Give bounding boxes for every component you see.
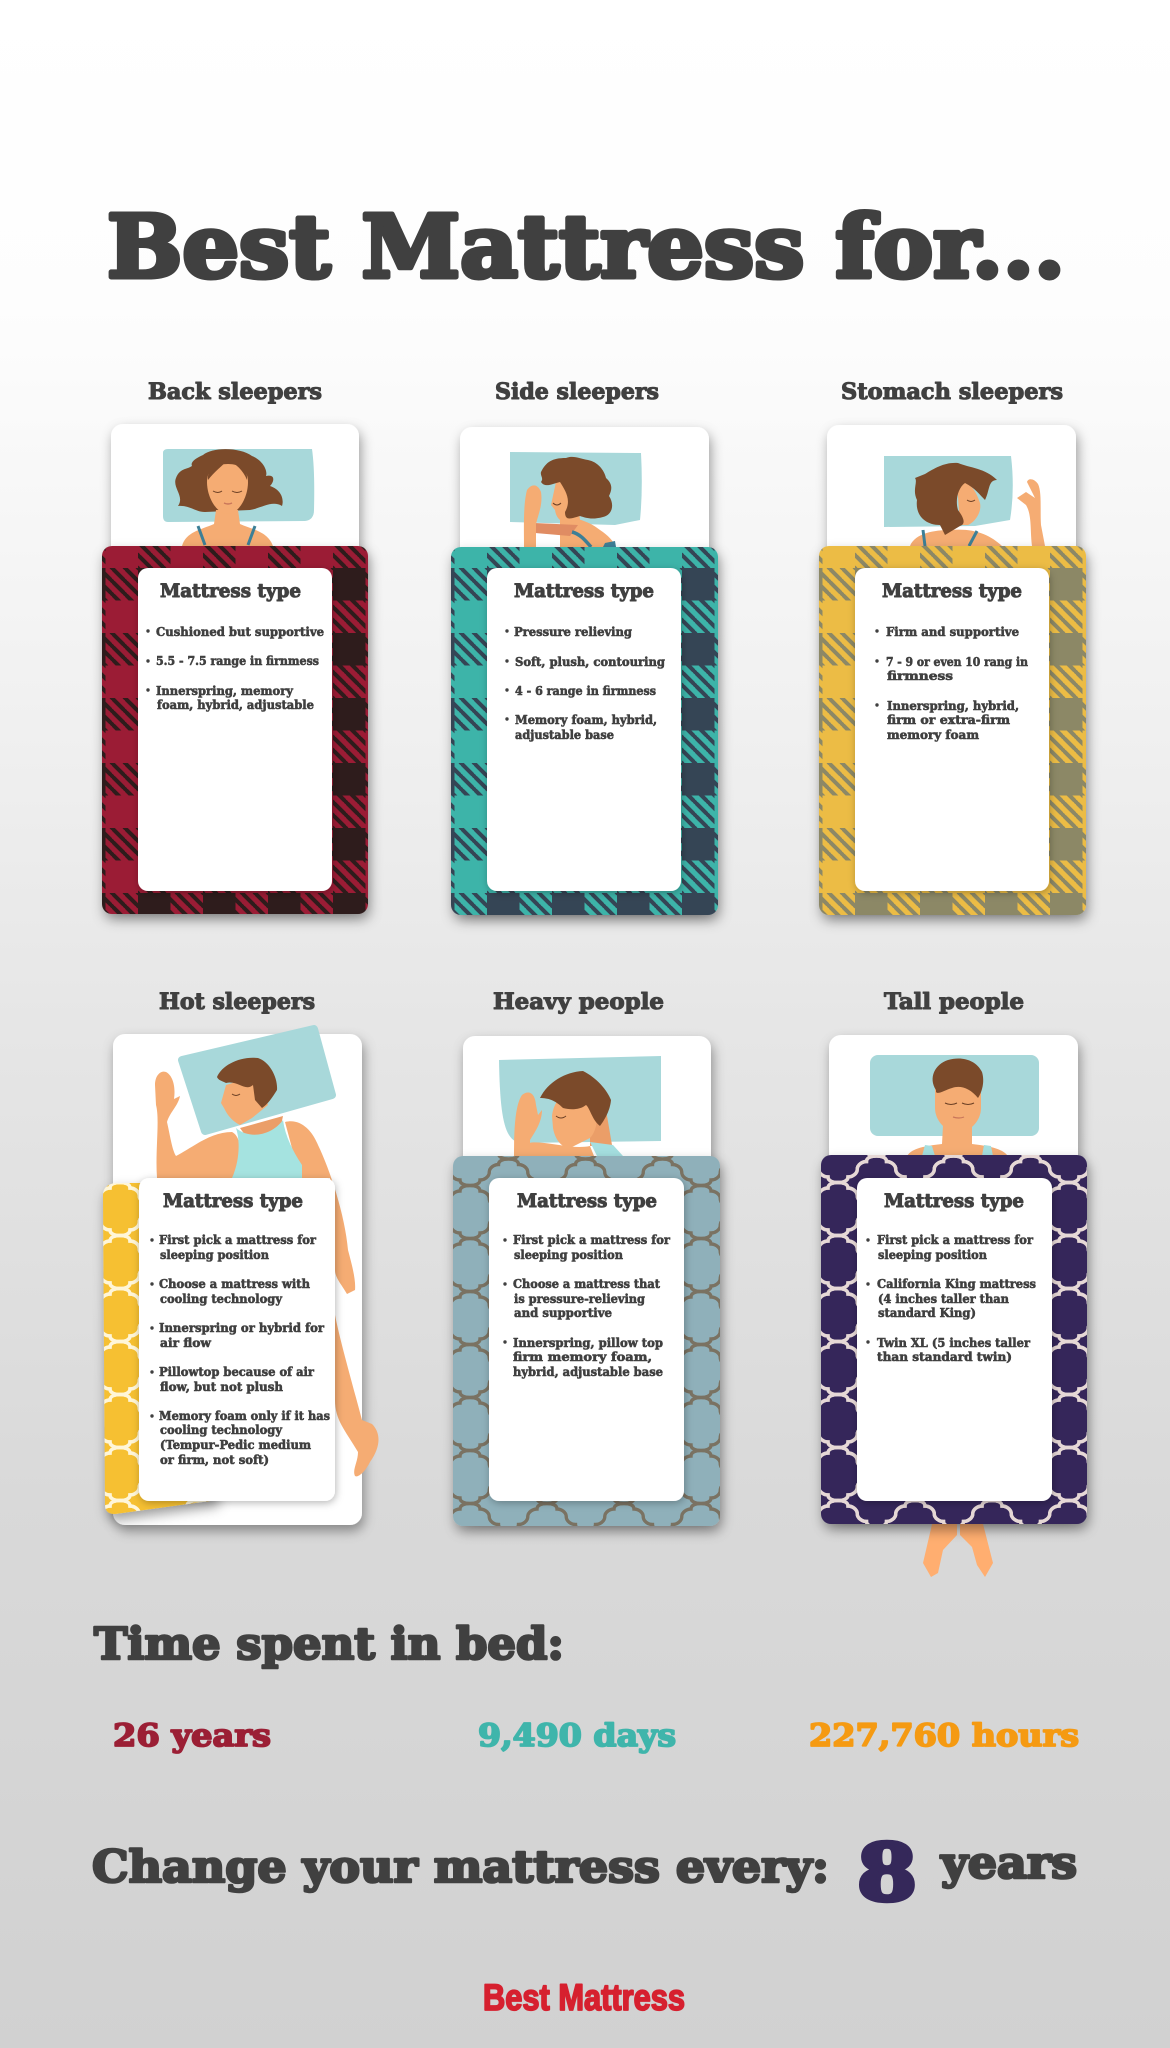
bullet list: Soft, plush, contouring (515, 655, 666, 669)
card heading: Mattress type (882, 580, 1022, 602)
stat: years: 26 years (113, 1718, 271, 1754)
logo: Best Mattress (483, 1977, 685, 2018)
info card (139, 1178, 335, 1501)
bullet list: Innerspring, pillow top (513, 1336, 663, 1350)
bullet list: than standard twin) (877, 1350, 1012, 1364)
bullet list: Firm and supportive (886, 625, 1019, 639)
bullet list: Memory foam only if it has (159, 1409, 330, 1423)
illustration: feet sticking out (923, 1520, 993, 1577)
bullet list: First pick a mattress for (159, 1233, 317, 1247)
bullet list: 7 - 9 or even 10 rang in (886, 655, 1028, 669)
bullet list: standard King) (878, 1306, 976, 1320)
heading: Heavy people (493, 989, 664, 1015)
bullet list: Choose a mattress that (513, 1277, 660, 1291)
folded yellow blanket (103, 1183, 217, 1514)
heading: Back sleepers (148, 379, 322, 405)
bullet list: is pressure-relieving (514, 1292, 646, 1306)
panel: back sleepers (102, 379, 368, 914)
bullet list: 5.5 - 7.5 range in firnmess (156, 654, 319, 668)
info card (489, 1178, 684, 1501)
heading: Side sleepers (495, 379, 659, 405)
plaid blanket (102, 546, 368, 914)
bullet list: California King mattress (877, 1277, 1036, 1291)
plaid blanket (819, 546, 1086, 915)
card heading: Mattress type (163, 1190, 303, 1212)
bullet list: Pillowtop because of air (159, 1365, 315, 1379)
heading: Tall people (884, 989, 1024, 1015)
card heading: Mattress type (514, 580, 654, 602)
bullet list: (4 inches taller than (878, 1292, 1009, 1306)
bullet list (150, 1233, 330, 1467)
sheet (111, 424, 359, 904)
bullet list: First pick a mattress for (513, 1233, 671, 1247)
bullet list (875, 625, 1028, 742)
bullet list: sleeping position (514, 1248, 623, 1262)
bullet list: firm memory foam, (513, 1350, 652, 1364)
bullet list: First pick a mattress for (877, 1233, 1034, 1247)
card heading: Mattress type (884, 1190, 1024, 1212)
illustration: woman on her stomach (884, 456, 1045, 546)
illustration: tall man on his back (870, 1055, 1039, 1156)
bullet list: Pressure relieving (514, 625, 633, 639)
sheet (463, 1036, 711, 1516)
heading: time spent in bed: Time spent in bed: (94, 1619, 564, 1670)
illustration: heavy man on his side (499, 1056, 661, 1156)
trellis blanket (453, 1156, 720, 1526)
panel: stomach sleepers (819, 379, 1086, 915)
sheet (113, 1034, 362, 1525)
card heading: Mattress type (160, 580, 301, 602)
bullet list (866, 1233, 1036, 1364)
bullet list: and supportive (514, 1306, 612, 1320)
sheet (460, 427, 709, 907)
info card (487, 568, 681, 891)
stat: days: 9,490 days (478, 1718, 676, 1754)
bullet list (146, 625, 324, 712)
info card (857, 1178, 1052, 1501)
heading: Stomach sleepers (841, 379, 1063, 405)
bullet list: firm or extra-firm (887, 713, 1010, 727)
bullet list: Innerspring, hybrid, (887, 699, 1019, 713)
bullet list: Choose a mattress with (159, 1277, 310, 1291)
bullet list: air flow (160, 1336, 212, 1350)
info card (855, 568, 1049, 891)
plaid blanket (451, 547, 718, 915)
title: Best Mattress for... (107, 197, 1065, 298)
bullet list: sleeping position (878, 1248, 987, 1262)
illustration: woman on her back (163, 449, 314, 546)
bullet list: foam, hybrid, adjustable (157, 698, 314, 712)
trellis blanket (821, 1155, 1087, 1524)
panel: side sleepers (451, 379, 718, 915)
sheet (827, 425, 1076, 905)
bullet list: cooling technology (160, 1423, 283, 1437)
stat: hours: 227,760 hours (809, 1718, 1079, 1754)
panel: hot sleepers (103, 989, 378, 1525)
bullet list: hybrid, adjustable base (513, 1365, 663, 1379)
illustration: man sleeping uncovered (155, 1029, 378, 1476)
bullet list: memory foam (887, 728, 979, 742)
bullet list: Cushioned but supportive (156, 625, 324, 639)
info card (138, 568, 332, 891)
bullet list: sleeping position (160, 1248, 269, 1262)
bullet list: 4 - 6 range in firmness (515, 684, 656, 698)
bullet list: or firm, not soft) (160, 1453, 269, 1467)
callout number: 8 (857, 1828, 917, 1919)
bullet list: adjustable base (515, 728, 614, 742)
bullet list: Innerspring or hybrid for (159, 1321, 325, 1335)
panel: tall people (821, 989, 1087, 1577)
sheet (829, 1035, 1078, 1515)
bullet list (505, 625, 666, 742)
bullet list: Twin XL (5 inches taller (877, 1336, 1031, 1350)
bullet list: Memory foam, hybrid, (515, 713, 657, 727)
bullet list: flow, but not plush (160, 1380, 283, 1394)
bullet list (503, 1233, 671, 1379)
callout unit: years (940, 1838, 1077, 1889)
panel: heavy people (453, 989, 720, 1526)
bullet list: firmness (887, 669, 953, 683)
callout: change your mattress: Change your mattress every: (92, 1842, 829, 1893)
bullet list: (Tempur-Pedic medium (160, 1438, 311, 1452)
bullet list: Innerspring, memory (156, 684, 294, 698)
card heading: Mattress type (517, 1190, 657, 1212)
bullet list: cooling technology (160, 1292, 283, 1306)
heading: Hot sleepers (159, 989, 315, 1015)
illustration: woman on her side (510, 452, 642, 547)
